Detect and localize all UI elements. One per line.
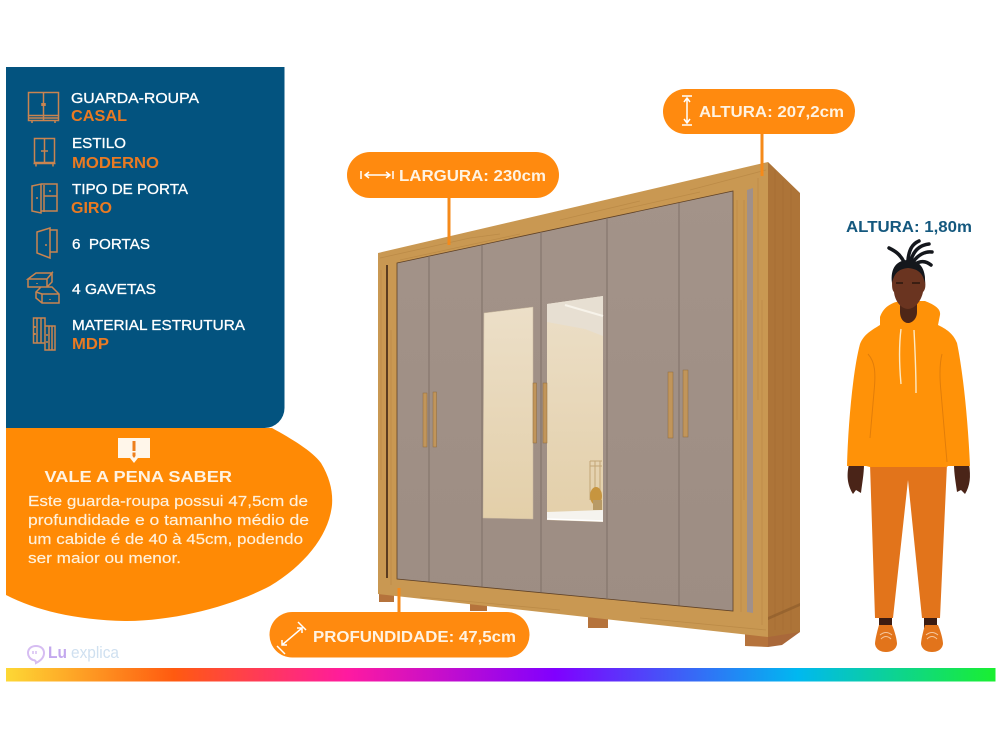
left mirror [483, 307, 533, 519]
neck and face [892, 260, 925, 323]
left frame groove [386, 265, 388, 578]
text: estilo moderno: ESTILO [72, 135, 126, 152]
callout: largura [347, 152, 559, 245]
wardrobe feet [379, 592, 800, 647]
icon: depth arrow [277, 622, 306, 654]
heading: VALE A PENA SABER [44, 469, 232, 486]
hoodie [847, 301, 970, 467]
text: tipo de porta giro [71, 181, 188, 217]
label: ALTURA: 207,2cm [699, 104, 844, 121]
panel: product specs [6, 67, 284, 428]
hoodie folds [868, 354, 947, 462]
handles [423, 370, 688, 447]
text: body: ser maior ou menor. [28, 550, 181, 567]
shoes [875, 625, 943, 652]
right mirror [547, 296, 603, 522]
text: body: profundidade e o tamanho médio de [28, 512, 309, 529]
person [846, 219, 972, 652]
icon: tipo de porta [32, 184, 57, 213]
label: LARGURA: 230cm [399, 168, 546, 185]
text: tipo de porta giro: TIPO DE PORTA [72, 181, 188, 198]
icon: material [34, 318, 55, 350]
person height label: ALTURA: 1,80m [846, 219, 972, 236]
logo: lu explica [28, 643, 119, 663]
text: guarda-roupa casal [71, 90, 199, 125]
door seams [429, 203, 679, 606]
grey side strip [747, 188, 753, 613]
text: 6 portas: 6 PORTAS [72, 236, 150, 253]
panel: vale a pena saber [6, 428, 332, 621]
hands [848, 464, 970, 494]
door panel [397, 191, 733, 611]
text: guarda-roupa casal: CASAL [71, 108, 127, 125]
wardrobe side [768, 162, 800, 637]
rainbow bar [6, 668, 996, 682]
trousers [870, 464, 947, 618]
text: tipo de porta giro: GIRO [71, 200, 112, 217]
icon: door [37, 228, 57, 258]
logo: lu explica: Lu [48, 643, 67, 662]
text: material estrutura mdp: MDP [72, 336, 109, 353]
text: 4 gavetas: 4 GAVETAS [72, 281, 156, 298]
text: guarda-roupa casal: GUARDA-ROUPA [71, 90, 199, 107]
icon: drawers [28, 273, 59, 303]
callout: altura [663, 89, 855, 176]
text: body: um cabide é de 40 à 45cm, podendo [28, 531, 303, 548]
callout: profundidade [270, 588, 530, 658]
icon: wardrobe estilo [34, 138, 56, 166]
text: estilo moderno [72, 135, 159, 172]
wardrobe [378, 162, 800, 647]
text: material estrutura mdp: MATERIAL ESTRUTURA [72, 317, 245, 334]
hair dreads [889, 241, 932, 265]
hood strings [900, 329, 916, 393]
logo: lu explica: explica [71, 643, 119, 662]
wood grain [380, 170, 766, 630]
wardrobe front frame [378, 162, 768, 637]
icon: wardrobe casal [28, 92, 58, 123]
socks [879, 618, 937, 628]
icon: width arrow [361, 171, 393, 179]
text: material estrutura mdp [72, 317, 245, 353]
icon: alert speech bubble [118, 438, 150, 463]
icon: height arrow [682, 96, 692, 125]
text: body [28, 493, 309, 567]
text: estilo moderno: MODERNO [72, 155, 159, 172]
label: PROFUNDIDADE: 47,5cm [313, 629, 516, 646]
text: body: Este guarda-roupa possui 47,5cm de [28, 493, 308, 510]
